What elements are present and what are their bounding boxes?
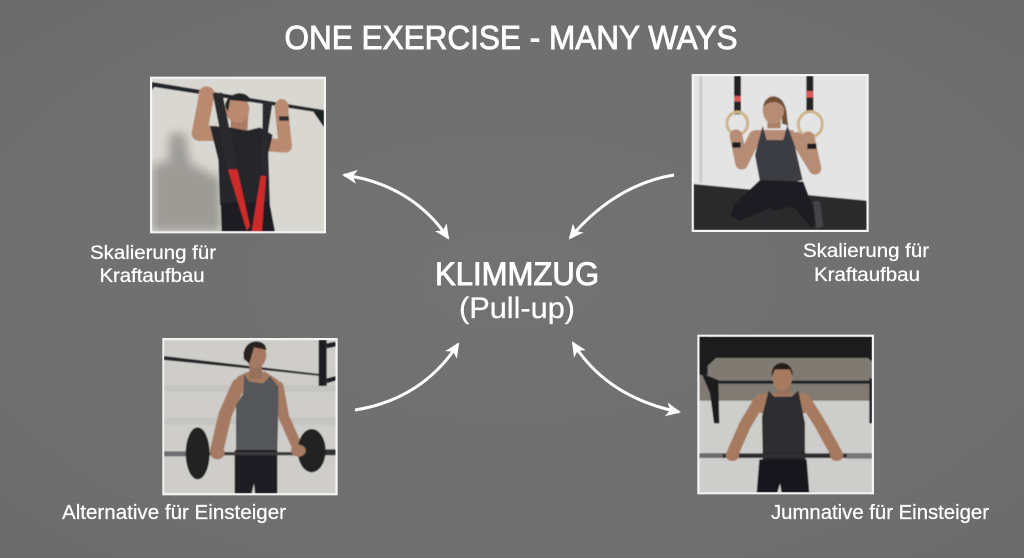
center heading: KLIMMZUG xyxy=(435,256,599,292)
panel: ring squat xyxy=(692,74,869,232)
center heading xyxy=(435,256,599,325)
arrow: center to top left, double-headed xyxy=(344,175,448,238)
panel: assisted pull-up with band xyxy=(150,77,326,233)
panel: barbell deadlift hold xyxy=(162,338,338,495)
label: bottom left: Alternative für Einsteiger xyxy=(62,502,286,524)
label: top left xyxy=(90,243,217,287)
label: top right: Skalierung für xyxy=(803,241,930,262)
label: top left: Skalierung für xyxy=(90,243,217,264)
title: ONE EXERCISE - MANY WAYS xyxy=(284,19,738,56)
label: top right: Kraftaufbau xyxy=(814,265,920,286)
arrow: top right to center xyxy=(570,175,674,238)
center heading: (Pull-up) xyxy=(459,292,575,325)
label: top right xyxy=(803,241,930,286)
arrow: bottom left to center xyxy=(355,344,458,410)
arrow: center to bottom right, double-headed xyxy=(573,343,679,412)
panel: overhand barbell hold xyxy=(697,335,874,494)
label: top left: Kraftaufbau xyxy=(100,266,204,287)
label: bottom right: Jumnative für Einsteiger xyxy=(771,502,989,524)
